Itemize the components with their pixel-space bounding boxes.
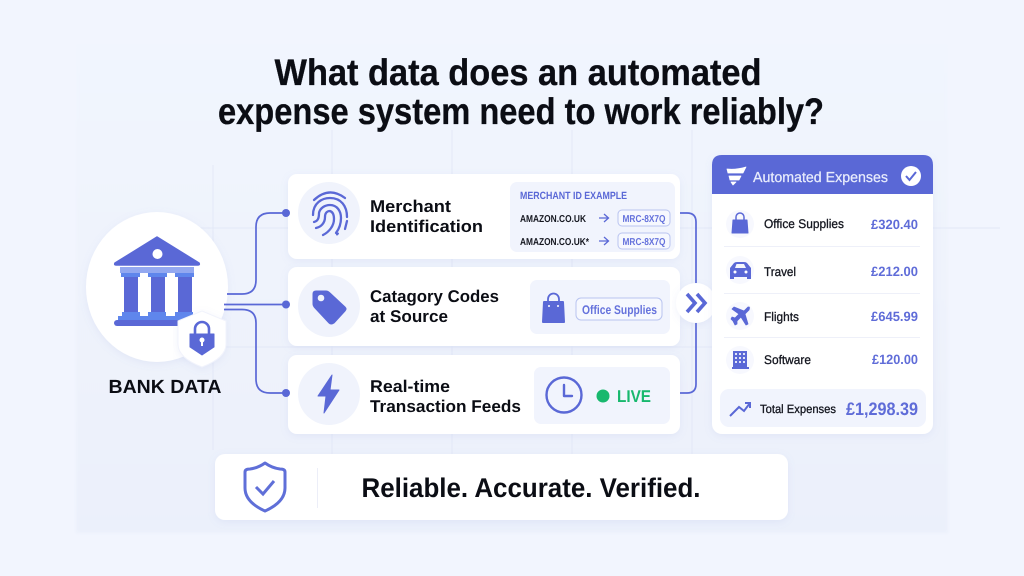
row: flights bbox=[726, 302, 918, 330]
heading: real-time feeds bbox=[370, 377, 521, 416]
row: software: £120.00 bbox=[872, 352, 918, 367]
total expenses row: Total Expenses bbox=[760, 402, 836, 416]
icon: lightning bolt bbox=[298, 363, 360, 425]
connector lines from bank to cards bbox=[224, 209, 290, 397]
panel: automated expenses bbox=[712, 155, 933, 434]
icon: clock bbox=[546, 378, 582, 412]
bank data icon group bbox=[86, 212, 228, 398]
row: travel: Travel bbox=[764, 265, 796, 279]
heading: category codes bbox=[370, 287, 499, 326]
heading: category codes: at Source bbox=[370, 307, 448, 326]
total expenses row bbox=[720, 389, 926, 427]
icon: logo bbox=[727, 167, 746, 185]
connector from cards to results panel bbox=[680, 213, 696, 393]
row: office supplies bbox=[726, 210, 918, 238]
row: office supplies: £320.40 bbox=[871, 217, 918, 232]
heading: merchant identification: Identification bbox=[370, 217, 483, 236]
icon: check badge bbox=[901, 166, 921, 186]
panel: category codes bbox=[288, 267, 680, 346]
merchant id example box: MRC-8X7Q bbox=[622, 214, 666, 225]
panel: merchant identification bbox=[288, 174, 680, 259]
row: travel: £212.00 bbox=[871, 264, 918, 279]
panel: real-time feeds bbox=[288, 355, 680, 434]
title bbox=[218, 52, 824, 132]
heading: category codes: Catagory Codes bbox=[370, 287, 499, 306]
row: flights: Flights bbox=[764, 310, 799, 324]
merchant id example box: AMAZON.CO.UK bbox=[520, 214, 587, 225]
lock shield badge bbox=[178, 311, 226, 367]
panel header bbox=[712, 155, 933, 194]
merchant id example box: AMAZON.CO.UK* bbox=[520, 237, 589, 248]
icon: shield check bbox=[245, 463, 285, 511]
heading: merchant identification bbox=[370, 197, 483, 236]
row: office supplies: Office Supplies bbox=[764, 217, 844, 231]
merchant id example box bbox=[510, 182, 675, 252]
arrow: double chevron connector bbox=[676, 283, 716, 323]
heading: real-time feeds: Transaction Feeds bbox=[370, 397, 521, 416]
merchant id example box: MERCHANT ID EXAMPLE bbox=[520, 190, 627, 202]
title: What data does an automated bbox=[274, 52, 762, 93]
banner: reliable accurate verified bbox=[215, 454, 788, 520]
row: software bbox=[726, 346, 918, 374]
row: software: Software bbox=[764, 353, 811, 367]
bank data label: BANK DATA bbox=[108, 377, 222, 398]
bank circle bbox=[86, 212, 228, 362]
row: travel bbox=[726, 256, 918, 284]
live status box: LIVE bbox=[617, 387, 651, 406]
merchant id example box: MRC-8X7Q bbox=[622, 237, 666, 248]
live status box bbox=[534, 367, 670, 424]
icon: price tag bbox=[298, 275, 360, 337]
office supplies example box bbox=[530, 280, 670, 334]
banner: reliable accurate verified: Reliable. Accurate. Verified. bbox=[362, 473, 700, 503]
office supplies example box: Office Supplies bbox=[582, 303, 657, 317]
icon: bank building bbox=[114, 237, 202, 326]
heading: merchant identification: Merchant bbox=[370, 197, 451, 216]
heading: real-time feeds: Real-time bbox=[370, 377, 450, 396]
total expenses row: £1,298.39 bbox=[846, 399, 918, 419]
row: flights: £645.99 bbox=[871, 309, 918, 324]
panel header: Automated Expenses bbox=[753, 170, 888, 186]
title: expense system need to work reliably? bbox=[218, 91, 824, 132]
icon: fingerprint bbox=[298, 182, 360, 244]
